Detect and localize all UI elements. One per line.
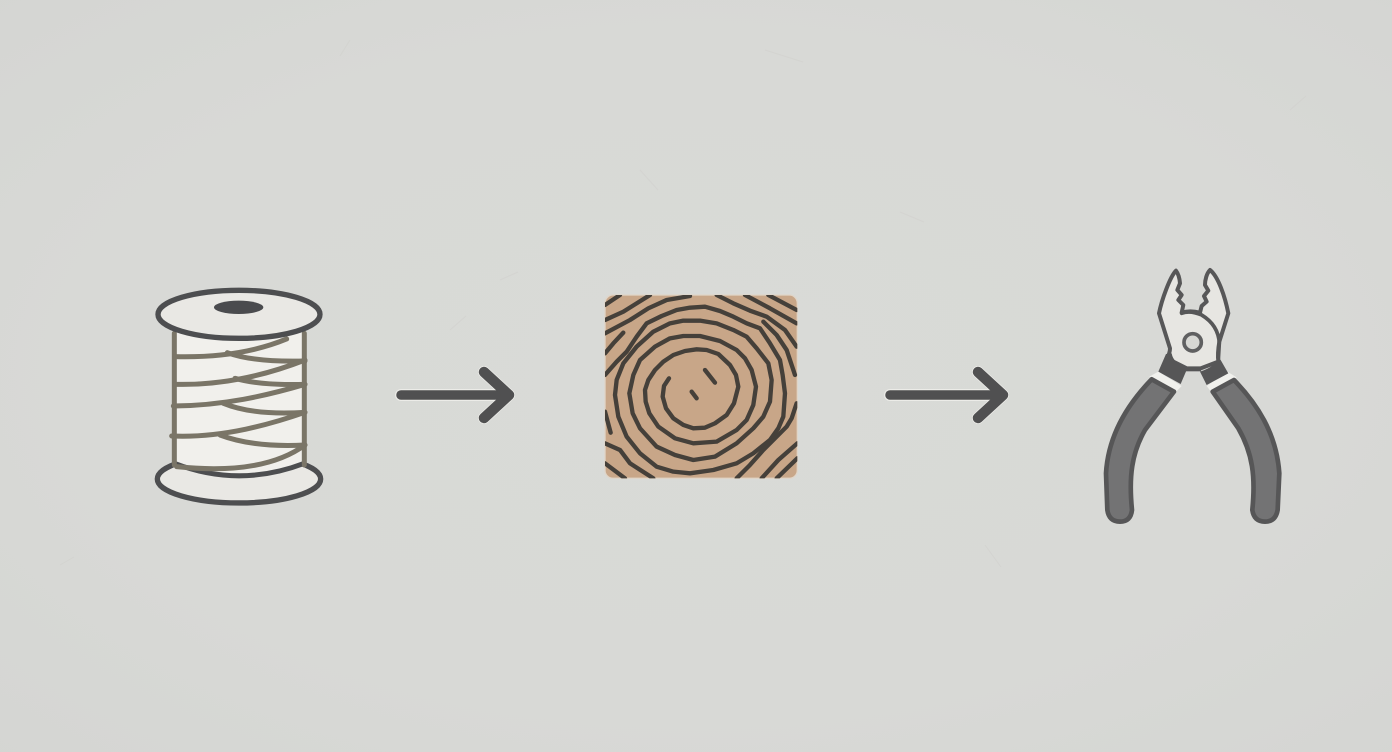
spool body: [174, 332, 304, 477]
jaw inner curve: [1182, 312, 1219, 360]
wood block: [605, 295, 797, 478]
growth rings: [605, 295, 797, 478]
right handle: [1213, 380, 1279, 522]
spool bottom flange: [157, 455, 321, 503]
icon: pliers: [1106, 270, 1279, 522]
neck link: [1185, 367, 1201, 371]
left handle: [1106, 379, 1174, 522]
arrow: wood to pliers: [890, 372, 1003, 418]
pivot: [1184, 334, 1201, 351]
spool hole: [214, 301, 263, 314]
body bottom rim: [174, 463, 304, 476]
spool top flange: [158, 290, 320, 338]
pliers collar bands: [1149, 372, 1237, 394]
thread windings: [172, 333, 305, 469]
left neck: [1158, 353, 1187, 384]
right neck: [1200, 358, 1228, 385]
icon: thread spool: [157, 290, 321, 503]
arrow: spool to wood: [401, 372, 509, 418]
icon: wood grain block: [605, 295, 797, 478]
jaws: [1159, 270, 1228, 368]
